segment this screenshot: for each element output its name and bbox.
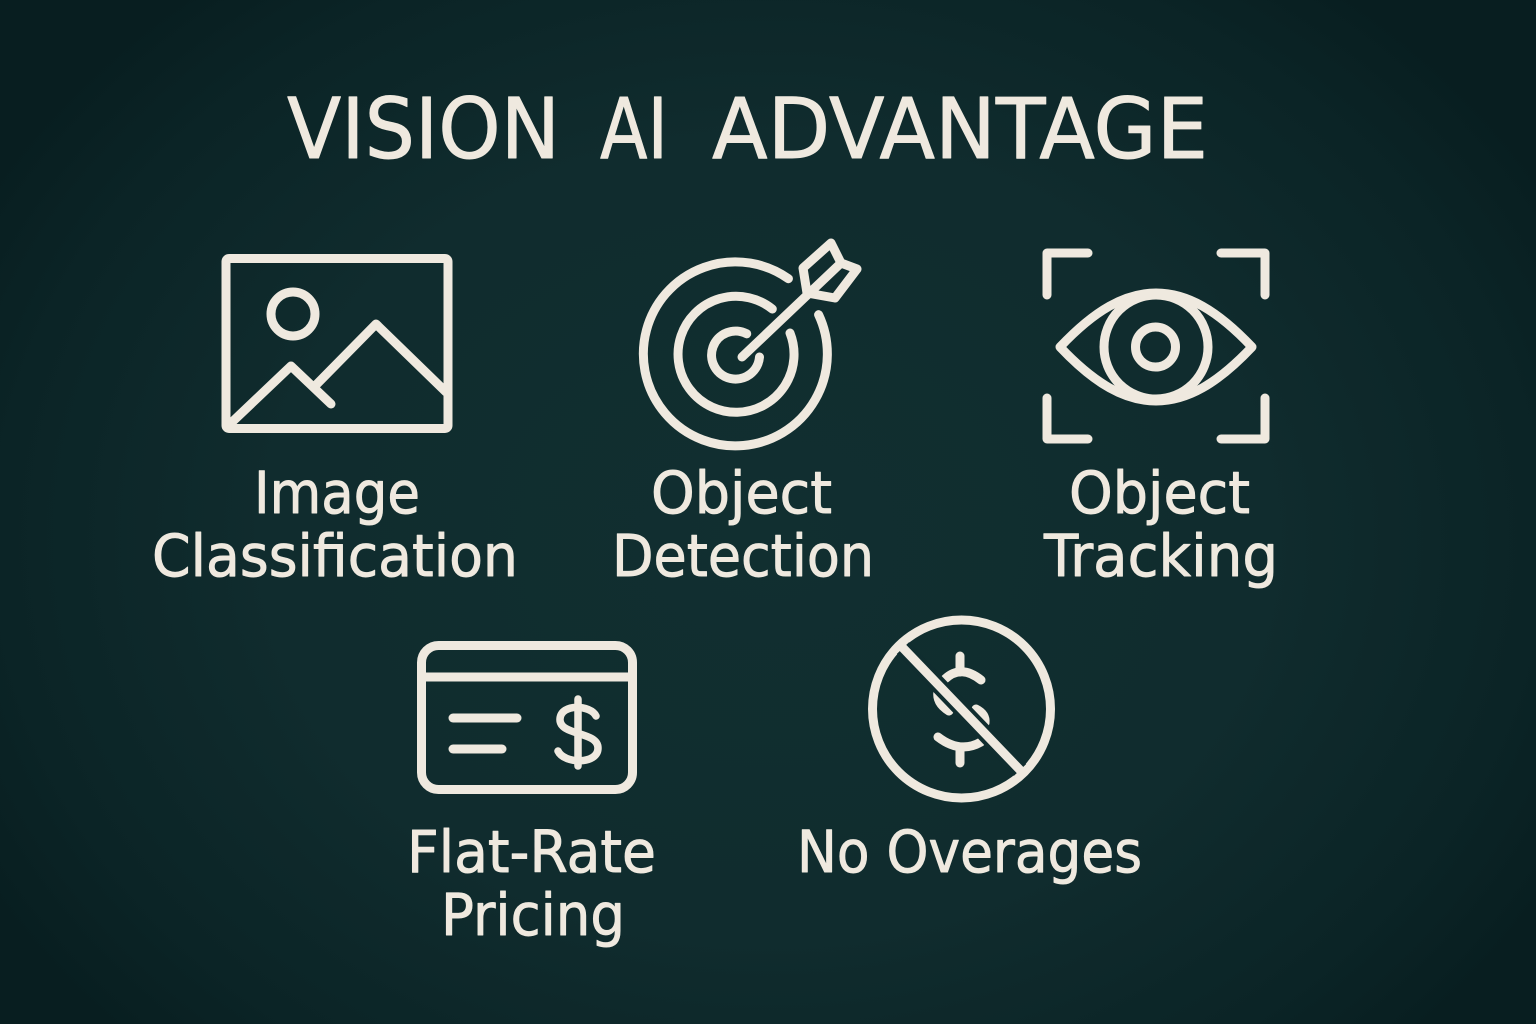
icon: pricing card with dollar sign — [422, 646, 632, 790]
item: object tracking — [1043, 253, 1278, 590]
label: object tracking: Object — [1069, 459, 1250, 527]
title: VISION — [287, 80, 560, 178]
icon: picture frame with mountains — [226, 258, 448, 428]
icon: target with arrow — [643, 243, 857, 446]
label: flat-rate pricing: Pricing — [441, 881, 625, 949]
label: flat-rate pricing — [407, 818, 656, 949]
label: image classification: Image — [254, 459, 420, 527]
title: ADVANTAGE — [712, 80, 1208, 178]
label: flat-rate pricing: Flat-Rate — [407, 818, 656, 886]
item: flat-rate pricing — [407, 646, 656, 949]
label: object detection — [612, 459, 874, 590]
label: object detection: Object — [651, 459, 832, 527]
icon: crossed-out dollar — [872, 620, 1050, 798]
label: object tracking: Tracking — [1043, 522, 1278, 590]
item: no overages — [797, 620, 1142, 886]
title: AI — [600, 80, 668, 178]
title — [287, 80, 1208, 178]
label: image classification: Classification — [152, 522, 518, 590]
label: no overages: No Overages — [797, 818, 1142, 886]
item: image classification — [152, 258, 518, 590]
label: object tracking — [1043, 459, 1278, 590]
label: object detection: Detection — [612, 522, 874, 590]
icon: eye in focus brackets — [1047, 253, 1265, 439]
label: image classification — [152, 459, 518, 590]
item: object detection — [612, 243, 874, 590]
